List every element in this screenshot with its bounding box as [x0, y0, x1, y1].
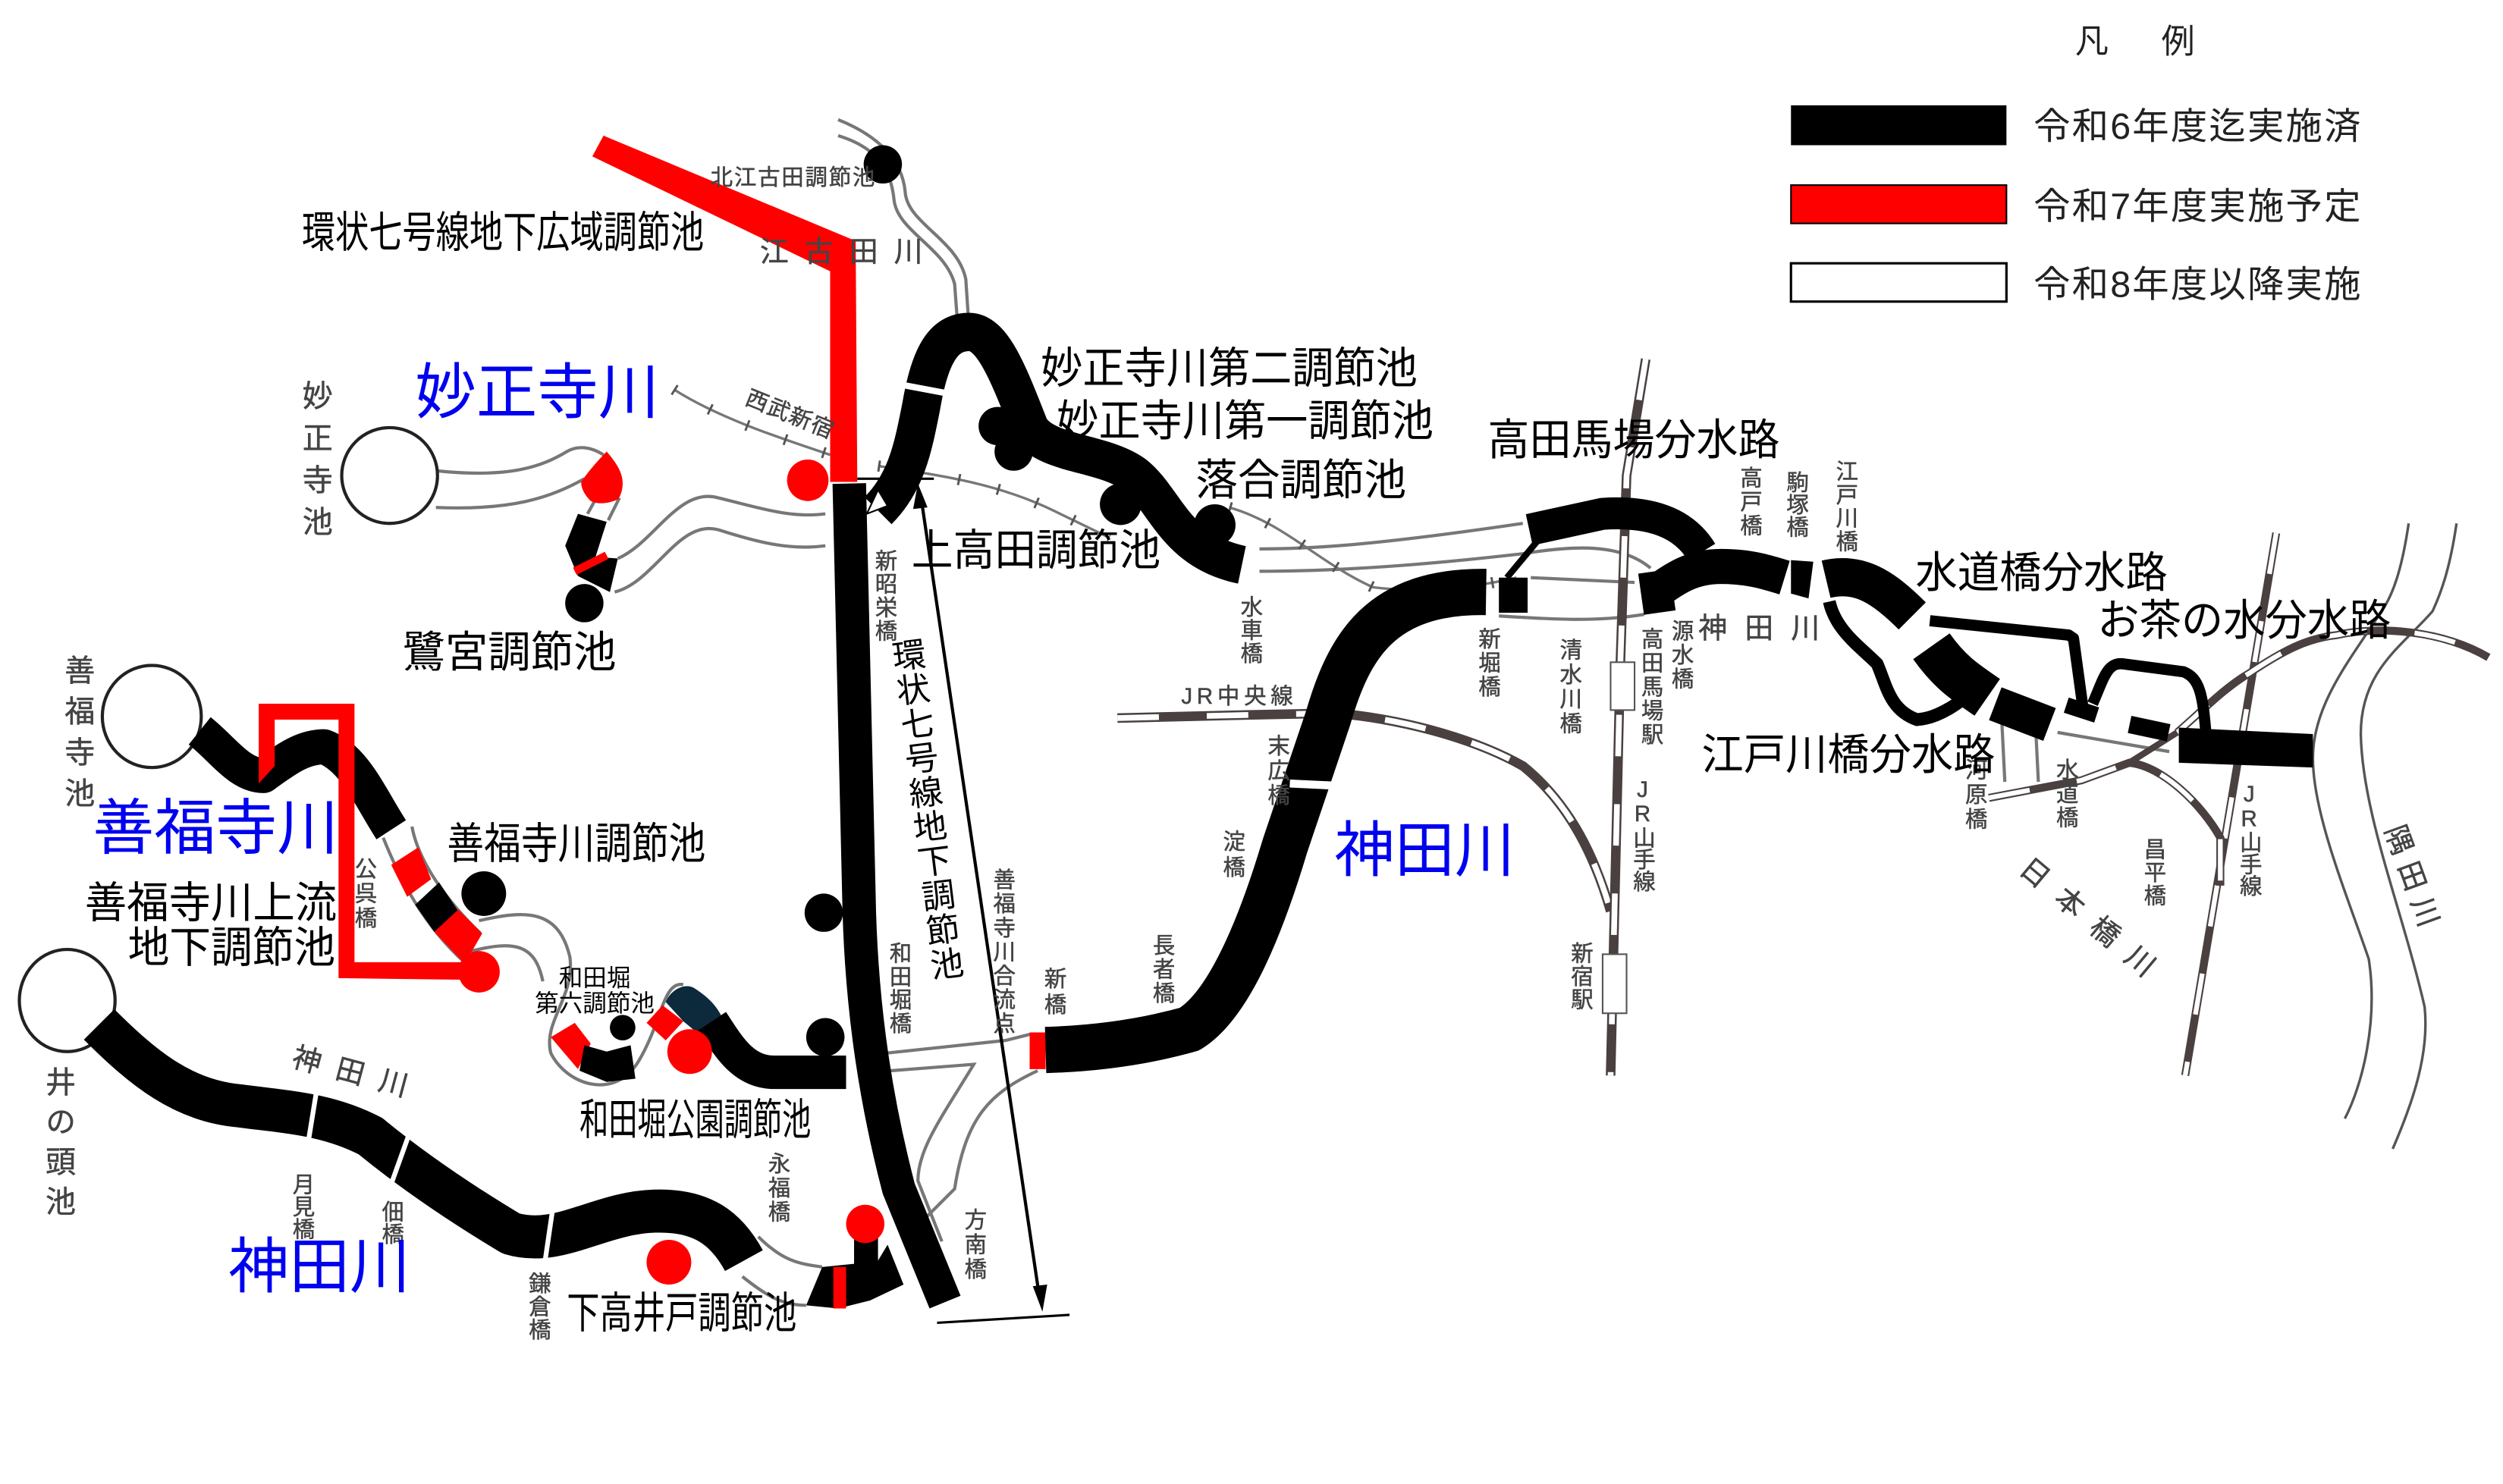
base map: river outlines: [436, 120, 2457, 1305]
map gray labels: JR山手線: [2237, 782, 2262, 897]
善福寺川 segments: [199, 731, 506, 964]
map gray labels: 月見橋: [289, 1173, 315, 1240]
callout labels: 上高田調節池: [912, 527, 1160, 575]
callout labels: 落合調節池: [1195, 456, 1406, 504]
和田堀 segments: [551, 893, 846, 1082]
map gray labels: 和田堀橋: [886, 942, 912, 1034]
legend: [1791, 23, 2360, 305]
callout labels: 環状七号線地下広域調節池: [302, 209, 704, 257]
callout labels: 善福寺川上流: [85, 880, 337, 927]
map gray labels: 隅田川: [2379, 821, 2445, 931]
callout labels: 地下調節池: [128, 924, 335, 972]
callout labels: 和田堀: [559, 964, 630, 991]
map gray labels: 日本橋川: [2013, 852, 2161, 984]
map gray labels: 水道橋: [2053, 758, 2078, 829]
map gray labels: 高田馬場駅: [1638, 627, 1663, 745]
river names (blue): 神田川: [1334, 817, 1515, 884]
環状七号線 completed section (black): [850, 484, 945, 1302]
map gray labels: 河原橋: [1962, 758, 1987, 830]
妙正寺川 segments: [565, 452, 828, 623]
map gray labels: 井の頭池: [41, 1066, 75, 1216]
callout labels: 第六調節池: [535, 990, 655, 1017]
map gray labels: 新昭栄橋: [872, 549, 897, 642]
map gray labels: 神田川: [289, 1042, 411, 1103]
map gray labels: 北江古田調節池: [711, 165, 875, 190]
map gray labels: 佃橋: [378, 1200, 404, 1245]
river names (blue): 妙正寺川: [415, 359, 659, 426]
map gray labels: 源水橋: [1669, 619, 1694, 690]
map gray labels: 高戸橋: [1737, 466, 1763, 537]
妙正寺川 downstream completed: [864, 145, 1242, 565]
map gray labels: 西武新宿: [742, 385, 837, 444]
map gray labels: 方南橋: [961, 1208, 987, 1280]
map gray labels: 永福橋: [765, 1152, 790, 1222]
callout labels: 妙正寺川第一調節池: [1057, 397, 1434, 445]
map gray labels: 善福寺池: [60, 654, 95, 808]
map gray labels: JR山手線: [1630, 777, 1656, 893]
分水路 branches: [1507, 513, 2206, 734]
map gray labels: 清水川橋: [1556, 638, 1582, 734]
map gray labels: 妙正寺池: [298, 380, 332, 536]
map gray labels: 昌平橋: [2140, 838, 2166, 907]
legend: 凡: [2075, 23, 2109, 60]
map gray labels: 神田川: [1698, 613, 1820, 645]
map gray labels: 淀橋: [1220, 830, 1245, 878]
map gray labels: 江古田川: [760, 237, 923, 268]
dimension arrow: 環状七号線地下調節池: [857, 478, 1069, 1322]
map gray labels: 新宿駅: [1568, 942, 1594, 1010]
callout labels: 善福寺川調節池: [447, 820, 705, 868]
map gray labels: 善福寺川合流点: [990, 868, 1016, 1034]
callout labels: 和田堀公園調節池: [579, 1097, 811, 1144]
base map: railway lines: [674, 359, 2489, 1075]
map gray labels: 末広橋: [1264, 734, 1290, 806]
map gray labels: 公呉橋: [352, 857, 377, 929]
map gray labels: 駒塚橋: [1783, 471, 1809, 538]
callout labels: お茶の水分水路: [2097, 598, 2391, 645]
callout labels: 下高井戸調節池: [567, 1290, 796, 1338]
神田川 midstream completed: [1030, 560, 2313, 1069]
legend: 令和6年度迄実施済: [2033, 106, 2360, 147]
callout labels: 鷺宮調節池: [403, 629, 616, 677]
map gray labels: 鎌倉橋: [526, 1272, 551, 1341]
callout labels: [85, 209, 2391, 1338]
環状七号線 planned section (red): [592, 136, 857, 482]
callout labels: 環状七号線地下調節池: [885, 636, 965, 983]
callout labels: 水道橋分水路: [1915, 549, 2168, 597]
map gray labels: 長者橋: [1150, 933, 1175, 1004]
ponds: [19, 428, 438, 1052]
map gray labels: 新橋: [1041, 967, 1066, 1015]
river names (blue): 善福寺川: [93, 794, 338, 861]
map gray labels: JR中央線: [1181, 684, 1293, 709]
map gray labels: 新堀橋: [1475, 627, 1501, 698]
善福寺川上流地下調節池 planned route (red): [259, 704, 500, 993]
神田川 upstream completed: [99, 1024, 903, 1309]
legend: 令和8年度以降実施: [2033, 264, 2360, 305]
callout labels: 妙正寺川第二調節池: [1041, 345, 1418, 393]
callout labels: 高田馬場分水路: [1487, 417, 1780, 465]
callout labels: 江戸川橋分水路: [1701, 731, 1996, 779]
map gray labels: 水車橋: [1237, 595, 1263, 664]
river names (blue): 神田川: [228, 1233, 410, 1300]
legend: 例: [2161, 23, 2195, 60]
map gray labels: [41, 165, 2445, 1341]
river names (blue): [93, 359, 1515, 1300]
map gray labels: 江戸川橋: [1832, 460, 1858, 553]
legend: 令和7年度実施予定: [2033, 186, 2360, 227]
